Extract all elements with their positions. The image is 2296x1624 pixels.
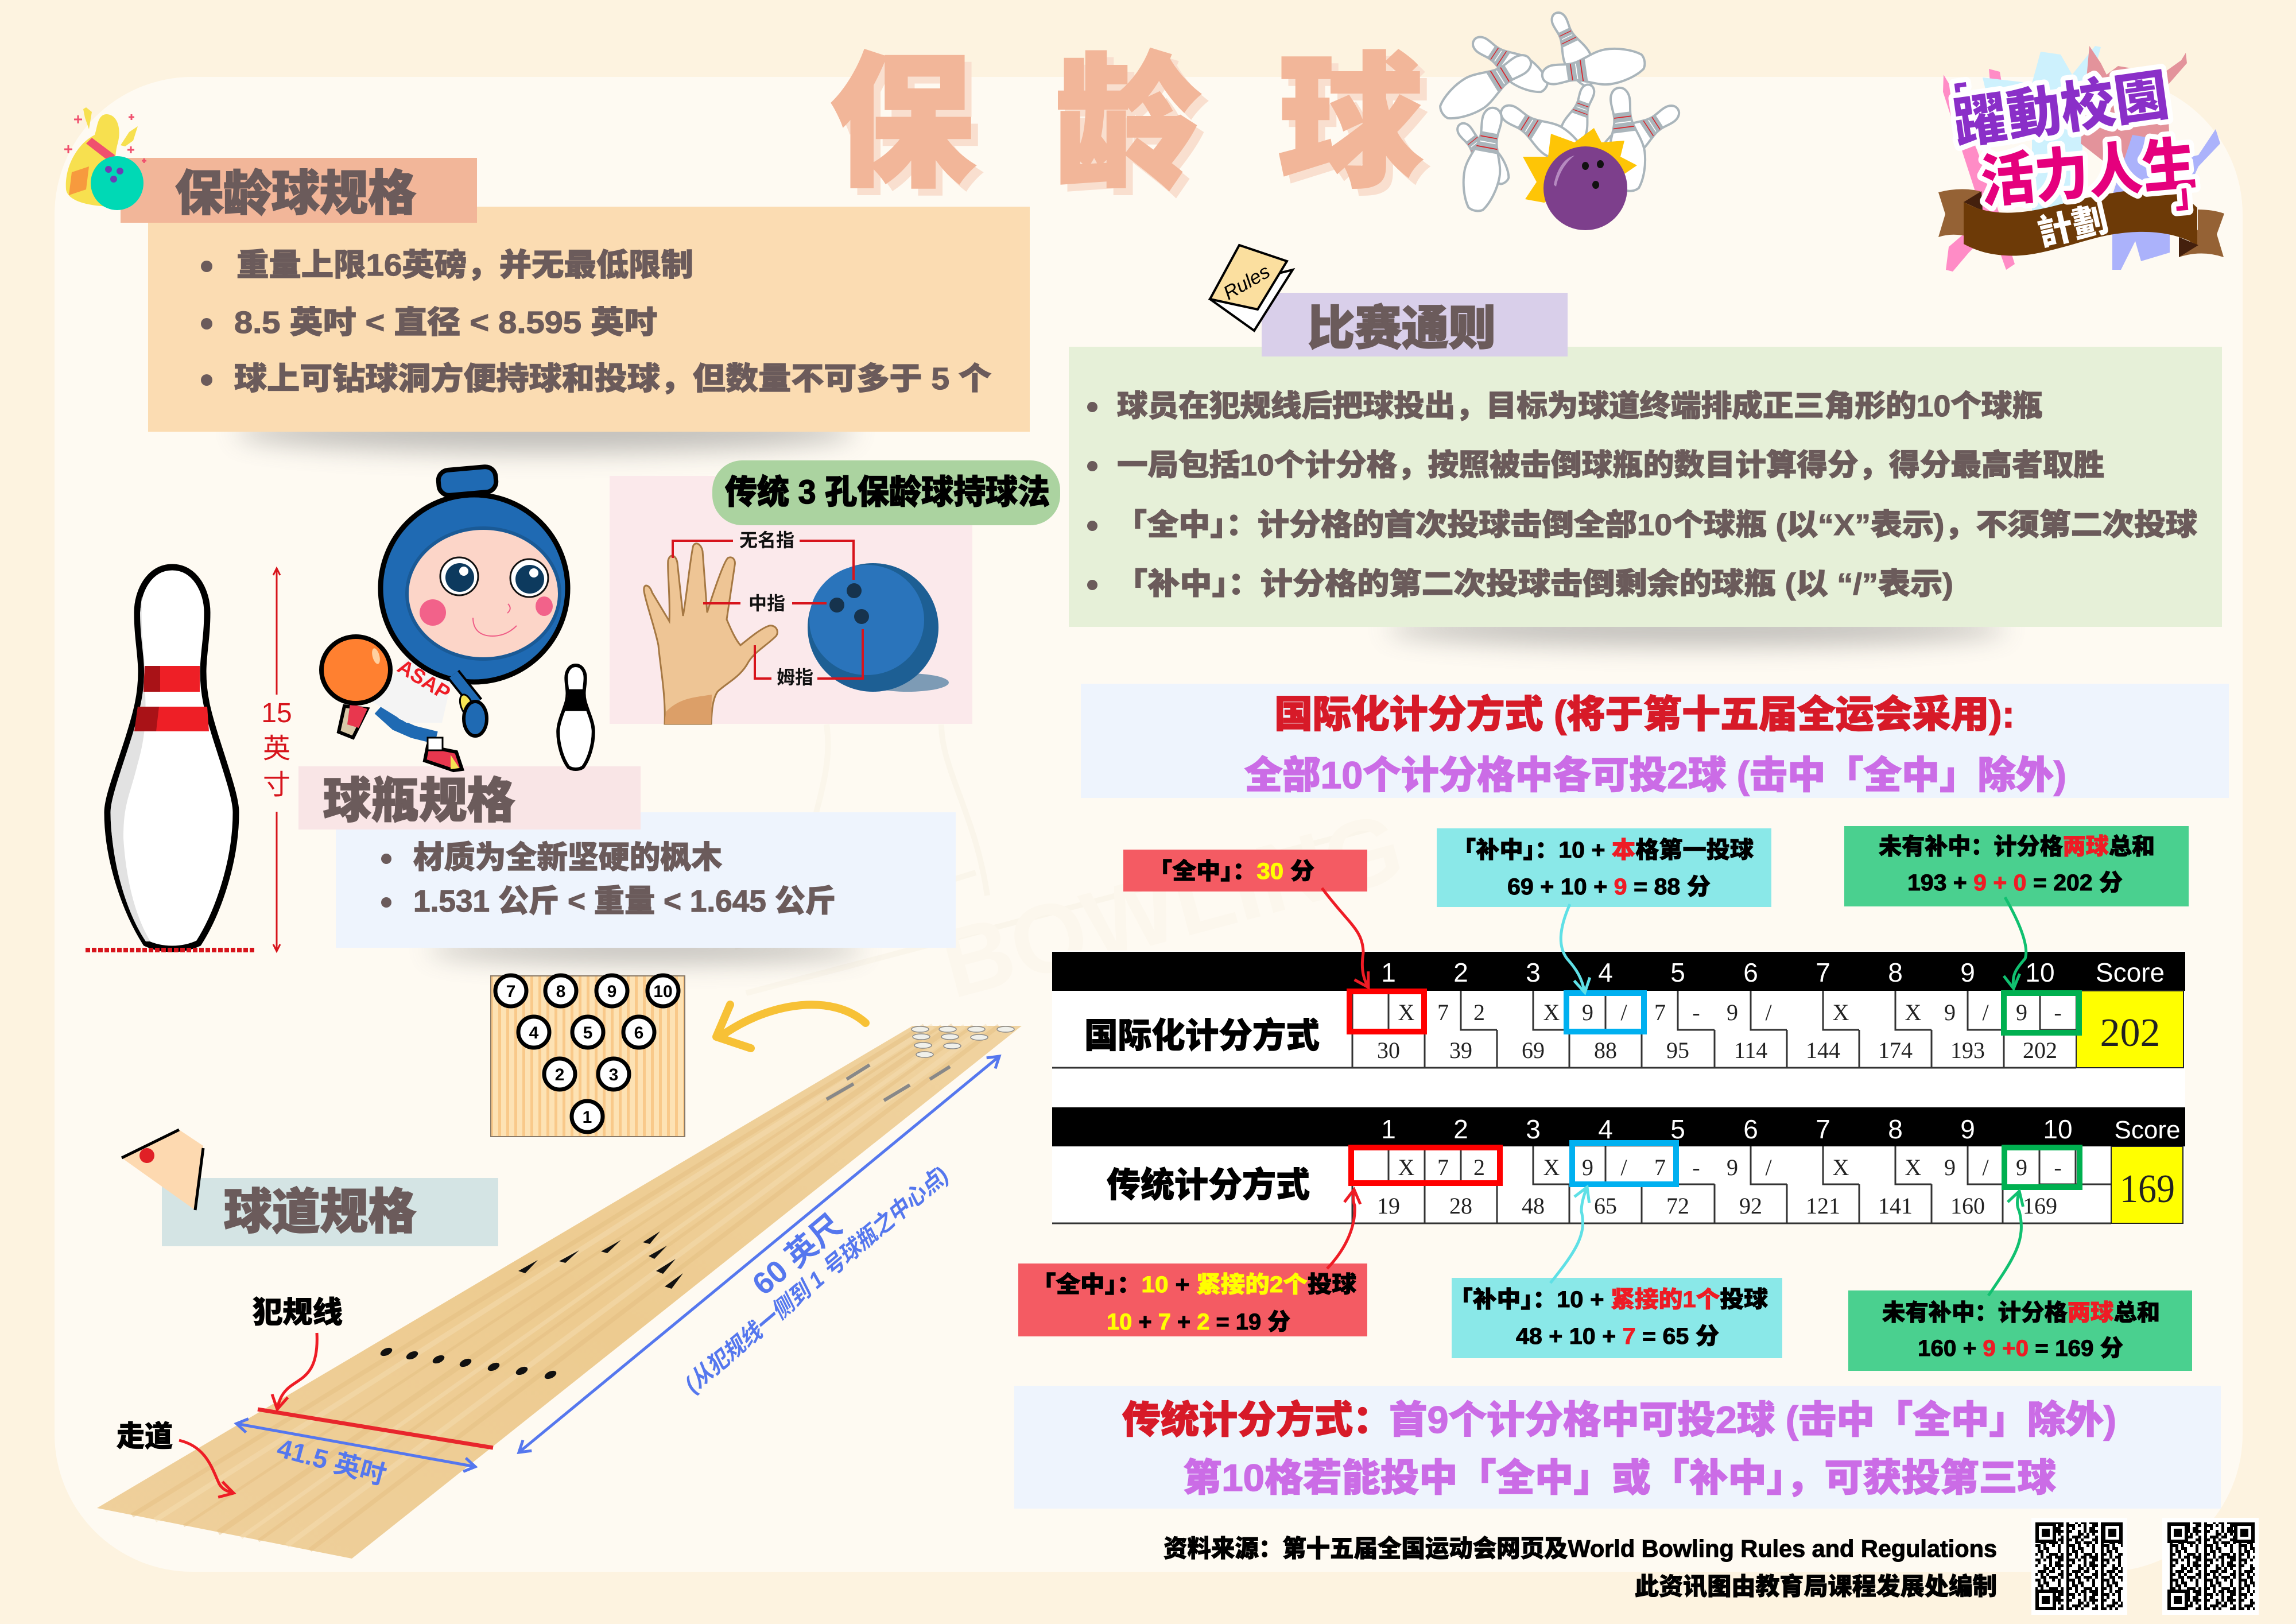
callout: spare international: 「补中」：10 + 本格第一投球 [1452,838,1754,863]
logo text: 「 [1932,80,1972,123]
logo text: 計劃 [2034,199,2112,254]
small pin [555,665,596,769]
running totals: 88 [1594,1037,1617,1063]
roll marks: 9 [1727,1154,1738,1180]
icon: pins and bowling ball [1432,6,1688,230]
roll marks: X [1543,999,1560,1025]
heading bar [121,158,477,223]
callout: open frame traditional: 160 + 9 +0 = 169 分 [1918,1336,2123,1361]
callout: strike traditional [1018,1263,1367,1336]
roll marks: 7 [1654,1154,1666,1180]
frame numbers: Score [2115,1116,2180,1144]
hand [644,544,777,724]
roll marks: / [1765,999,1772,1025]
pin deck diagram [491,975,685,1137]
callout: open frame international: 未有补中：计分格两球总和 [1879,834,2155,859]
running totals: 174 [1878,1037,1913,1063]
height label: 寸 [263,770,290,800]
running totals: 92 [1739,1193,1762,1219]
callout: open frame international [1844,826,2189,906]
roll marks: - [1692,999,1700,1025]
callout: open frame traditional [1848,1290,2192,1371]
height label: 15 [261,698,292,728]
logo text: 躍動校園 [1949,64,2173,156]
callout: spare traditional: 48 + 10 + 7 = 65 分 [1516,1324,1719,1349]
roll marks: 7 [1437,1154,1449,1180]
lane marks [827,1065,950,1100]
frame numbers [1381,958,2165,987]
heading: 保龄球规格 [175,166,416,220]
panel: pin specs [298,766,956,963]
pin numbers: 6 [634,1024,643,1042]
running totals [1377,1193,2057,1219]
roll marks: / [1982,1154,1989,1180]
roll marks: - [2054,1154,2062,1180]
big pin with height marker [86,567,292,951]
running totals: 28 [1449,1193,1472,1219]
arrows: callouts to score cells [1322,888,2026,1296]
final score: 202 [2100,1011,2161,1055]
approach label: 走道 [117,1420,173,1452]
note line 1 continued: 首9个计分格中可投2球 (击中「全中」除外) [1389,1398,2116,1441]
frame numbers: 1 [1381,958,1396,987]
callout: spare traditional [1449,1278,1782,1358]
frame numbers: 5 [1670,958,1685,987]
mini lane icon [122,1130,203,1210]
arrow: red top [1322,888,1368,987]
roll marks: X [1543,1154,1560,1180]
wood grain [132,1026,999,1550]
icon: rules note: Rules [1220,261,1274,304]
note line 2: 第10格若能投中「全中」或「补中」，可获投第三球 [1183,1456,2056,1499]
callout: open frame international: 193 + 9 + 0 = 202 分 [1907,870,2123,896]
rules text: 「全中」：计分格的首次投球击倒全部10个球瓶 (以“X”表示)，不须第二次投球 [1115,509,2197,542]
specs text: 材质为全新坚硬的枫木 [413,840,722,875]
frame numbers: 10 [2025,958,2055,987]
lane length label: 60 英尺 [746,1208,848,1302]
height label: 英 [263,734,290,764]
roll marks: 9 [2016,999,2027,1025]
callout: spare international [1437,828,1771,907]
panel: bowling ball specs [121,158,1030,452]
pin numbers: 2 [555,1065,564,1084]
ball [808,563,949,692]
final score: 169 [2120,1167,2175,1211]
logo ribbon [1938,189,2224,257]
panel: international scoring note [1081,684,2229,798]
logo figures [1943,46,2220,272]
running totals: 169 [2023,1193,2057,1219]
running totals: 69 [1522,1037,1545,1063]
frame numbers [1381,1114,2180,1144]
grip heading: 传统 3 孔保龄球持球法 [725,474,1050,511]
running totals: 121 [1806,1193,1840,1219]
frame numbers: 3 [1526,1114,1541,1144]
deck [491,976,685,1137]
roll marks: - [2054,999,2062,1025]
frame numbers: 9 [1960,958,1975,987]
frame numbers: 6 [1743,958,1758,987]
rules text: 「补中」：计分格的第二次投球击倒剩余的球瓶 (以 “/”表示) [1115,568,1953,601]
running totals: 72 [1666,1193,1689,1219]
running totals: 19 [1377,1193,1400,1219]
source footer: 资料来源：第十五届全国运动会网页及World Bowling Rules and Regulations [1163,1535,1997,1562]
yellow arrow [716,1005,866,1048]
roll marks: / [1620,1154,1627,1180]
highlights [1351,1143,2080,1187]
roll marks: 9 [1582,1154,1593,1180]
roll marks: 9 [1944,1154,1956,1180]
frame numbers: 10 [2043,1114,2073,1144]
pin numbers: 5 [583,1024,592,1042]
frame numbers: 1 [1381,1114,1396,1144]
running totals: 30 [1377,1037,1400,1063]
mascot [321,466,568,770]
panel body [336,812,956,948]
pin numbers: 9 [607,982,616,1001]
running totals: 95 [1666,1037,1689,1063]
header [1052,1107,2185,1146]
running totals: 48 [1522,1193,1545,1219]
panel: lane specs heading [122,1130,498,1246]
score cell [2076,991,2183,1068]
roll marks: 7 [1437,999,1449,1025]
finger labels: 无名指 [739,530,794,551]
height label [261,698,292,800]
mascot arm and hand [453,675,487,736]
pin numbers: 1 [583,1108,592,1127]
frame numbers: 9 [1960,1114,1975,1144]
running totals: 65 [1594,1193,1617,1219]
title: 龄 [1062,51,1206,211]
roll marks: 9 [2016,1154,2027,1180]
specs text [234,248,991,396]
callout: strike traditional: 「全中」： 10 + 紧接的2个 投球 [1031,1272,1356,1297]
arrow marks [518,1231,683,1289]
QR code 2 [2162,1518,2259,1615]
running totals: 202 [2023,1037,2057,1063]
mascot knob [437,466,497,505]
panel shadow [1387,611,2007,646]
logo text: 」 [2173,174,2210,215]
faint watermark: BOWLING [930,792,1414,1020]
frame numbers: 5 [1670,1114,1685,1144]
note line 1: 国际化计分方式 (将于第十五届全运会采用): [1274,693,2015,735]
roll marks: - [1692,1154,1700,1180]
mascot cheeks and mouth [420,596,553,636]
roll marks: 7 [1654,999,1666,1025]
frame numbers: 3 [1526,958,1541,987]
pin numbers: 8 [556,982,565,1001]
roll marks [1398,1154,2062,1180]
running totals: 193 [1950,1037,1985,1063]
title: 保 [831,44,974,204]
pin numbers: 4 [529,1024,539,1042]
faint watermark [735,724,1414,1020]
heading: 球道规格 [224,1185,416,1239]
pin numbers [506,982,673,1127]
roll marks: / [1620,999,1627,1025]
grip heading pill [712,460,1060,525]
hand wrist [665,695,712,724]
running totals: 141 [1878,1193,1913,1219]
note line 1: 传统计分方式： [1122,1398,1391,1441]
panel: rules [1069,293,2222,646]
height arrow [273,568,280,951]
bullets [1087,402,1097,590]
mascot eyes [440,557,548,597]
title: 保 [837,51,981,211]
panel: grip diagram [610,460,1060,724]
pin numbers: 3 [609,1065,618,1084]
highlights [1349,991,2079,1033]
callout: spare traditional: 「补中」：10 + 紧接的1个投球 [1449,1287,1768,1312]
logo text: 活力人生 [1978,132,2198,215]
frame numbers: 8 [1888,1114,1903,1144]
title: 球 [1279,44,1422,204]
specs text: 1.531 公斤 < 重量 < 1.645 公斤 [413,884,836,918]
callout: strike international [1123,850,1367,892]
roll marks: X [1398,1154,1415,1180]
frame numbers: 8 [1888,958,1903,987]
note line 2: 全部10个计分格中各可投2球 (击中「全中」除外) [1244,754,2066,796]
lane length note: (从犯规线一侧到 1 号球瓶之中心点) [680,1162,953,1397]
roll marks: X [1833,1154,1849,1180]
credit line: 此资讯图由教育局课程发展处编制 [1635,1573,1997,1600]
foul line arrow [277,1333,317,1409]
frame numbers: Score [2096,958,2165,987]
rules text: 球员在犯规线后把球投出，目标为球道终端排成正三角形的10个球瓶 [1117,389,2043,423]
pin shading [111,597,150,941]
roll marks: 9 [1727,999,1738,1025]
pin circles [495,975,678,1132]
title [831,44,1429,211]
header [1052,952,2185,991]
roll marks: 9 [1582,999,1593,1025]
roll marks: 2 [1473,1154,1485,1180]
row label: 传统计分方式 [1107,1166,1310,1204]
finger labels: 中指 [748,593,785,614]
arrow: red bottom [1327,1189,1355,1269]
score cell [2111,1146,2183,1223]
mascot lettering: ASAP [394,654,455,705]
specs text [413,840,836,918]
scoreboard: international [1052,952,2185,1068]
callout: strike traditional: 10 + 7 + 2 = 19 分 [1107,1309,1290,1335]
arrow: cyan top [1561,904,1585,993]
pin bands [144,666,200,692]
running totals [1377,1037,2057,1063]
heading bar [298,766,641,830]
frame numbers: 6 [1743,1114,1758,1144]
logo: campus programme [1932,46,2224,272]
pin spots [912,1026,1014,1057]
roll marks: / [1982,999,1989,1025]
bullets [381,854,391,908]
scoreboard background [1052,951,2185,1224]
foul line [258,1409,493,1448]
icon: pin and ball sticker [64,107,146,210]
mascot head [381,495,568,682]
callout: open frame traditional: 未有补中：计分格两球总和 [1882,1300,2160,1325]
panel shadow [235,411,855,452]
foul line label: 犯规线 [253,1296,343,1330]
scoreboard: traditional [1052,1107,2185,1223]
frame numbers: 4 [1598,958,1613,987]
frame numbers: 2 [1453,1114,1468,1144]
finger labels [739,530,813,688]
lane [97,1026,1022,1559]
panel body [1069,347,2222,627]
pointer lines [673,541,863,679]
mascot legs and shoes [339,703,462,770]
panel body [148,207,1030,432]
lane width arrow [236,1424,475,1467]
rules text: 一局包括10个计分格，按照被击倒球瓶的数目计算得分，得分最高者取胜 [1117,449,2104,482]
source footer [1163,1535,1997,1600]
arrow: cyan bottom [1550,1187,1587,1283]
finger labels: 姆指 [777,667,813,688]
approach dots [379,1346,558,1381]
mascot ball [321,637,390,703]
arrow: green bottom [1988,1191,2021,1296]
heading: 比赛通则 [1308,303,1496,355]
bullets [201,261,212,386]
title: 球 [1286,51,1429,211]
roll marks: X [1398,999,1415,1025]
callout: strike international: 「全中」：30 分 [1148,859,1314,884]
pin numbers: 10 [653,982,673,1001]
specs text: 球上可钻球洞方便持球和投球，但数量不可多于 5 个 [234,361,991,396]
specs text: 重量上限16英磅，并无最低限制 [236,248,693,282]
roll marks: 9 [1944,999,1956,1025]
rules text [1115,389,2197,601]
running totals: 114 [1734,1037,1767,1063]
heading: 球瓶规格 [323,774,515,828]
frame numbers: 4 [1598,1114,1613,1144]
heading bar [162,1178,498,1246]
frame numbers: 7 [1816,1114,1830,1144]
mascot face [407,528,560,659]
baseline [86,948,255,952]
grip background [610,476,972,724]
lane surface [97,1026,1022,1559]
logo text [1932,64,2210,254]
roll marks: 2 [1473,999,1485,1025]
roll marks: X [1905,999,1922,1025]
roll marks: X [1833,999,1849,1025]
approach arrow [179,1440,234,1493]
grid lines [1052,1146,2111,1223]
lane length arrow [519,1056,999,1452]
row label: 国际化计分方式 [1084,1017,1320,1055]
grid lines [1052,991,2076,1068]
title: 龄 [1056,44,1199,204]
roll marks: / [1765,1154,1772,1180]
heading bar [1262,293,1568,356]
mascot body [372,656,453,723]
pin numbers: 7 [506,982,515,1001]
arrow: green top [2005,897,2026,989]
running totals: 39 [1449,1037,1472,1063]
frame numbers: 2 [1453,958,1468,987]
running totals: 144 [1806,1037,1840,1063]
panel: traditional scoring note [1014,1386,2221,1509]
roll marks: X [1905,1154,1922,1180]
panel shadow [428,935,864,963]
lane width label: 41.5 英吋 [274,1433,390,1490]
running totals: 160 [1950,1193,1985,1219]
icon: rules note [1210,245,1293,331]
roll marks [1398,999,2062,1025]
frame numbers: 7 [1816,958,1830,987]
pin body [107,567,236,949]
callout: spare international: 69 + 10 + 9 = 88 分 [1507,874,1711,900]
specs text: 8.5 英吋 < 直径 < 8.595 英吋 [234,305,657,340]
QR code 1 [2031,1518,2127,1615]
